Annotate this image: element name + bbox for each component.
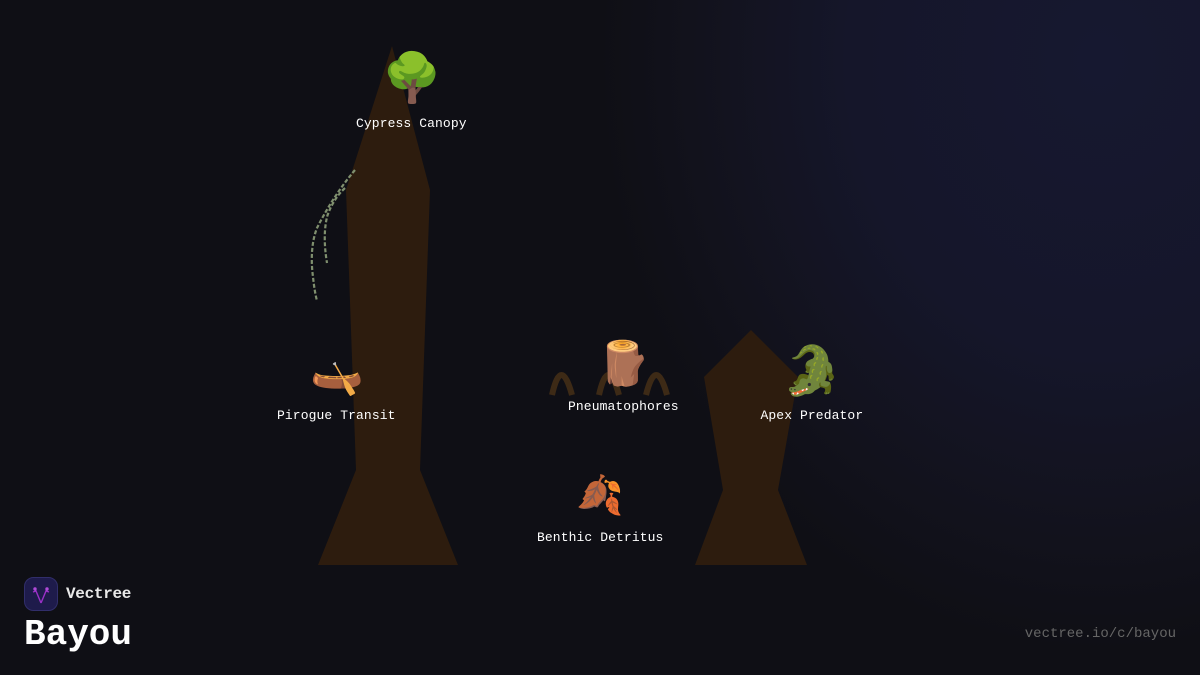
icon: crocodile: 🐊 xyxy=(782,342,842,399)
icon: canoe: 🛶 xyxy=(310,348,364,398)
title: Bayou xyxy=(24,614,132,655)
hanging moss strands xyxy=(312,170,355,301)
label: Pirogue Transit: Pirogue Transit xyxy=(277,408,396,423)
label: Pneumatophores: Pneumatophores xyxy=(568,399,679,414)
cypress trunk xyxy=(318,46,458,565)
pneumatophore roots xyxy=(552,375,667,395)
icon: fallen leaves: 🍂 xyxy=(576,474,623,518)
brand name: Vectree xyxy=(66,585,131,603)
source url: vectree.io/c/bayou xyxy=(1025,626,1176,642)
icon: cypress tree: 🌳 xyxy=(382,49,442,106)
label: Cypress Canopy: Cypress Canopy xyxy=(356,116,467,131)
label: Apex Predator: Apex Predator xyxy=(760,408,863,423)
secondary trunk xyxy=(695,330,807,565)
icon: log: 🪵 xyxy=(597,339,651,389)
logo: Vectree mark xyxy=(24,577,58,611)
label: Benthic Detritus: Benthic Detritus xyxy=(537,530,663,545)
